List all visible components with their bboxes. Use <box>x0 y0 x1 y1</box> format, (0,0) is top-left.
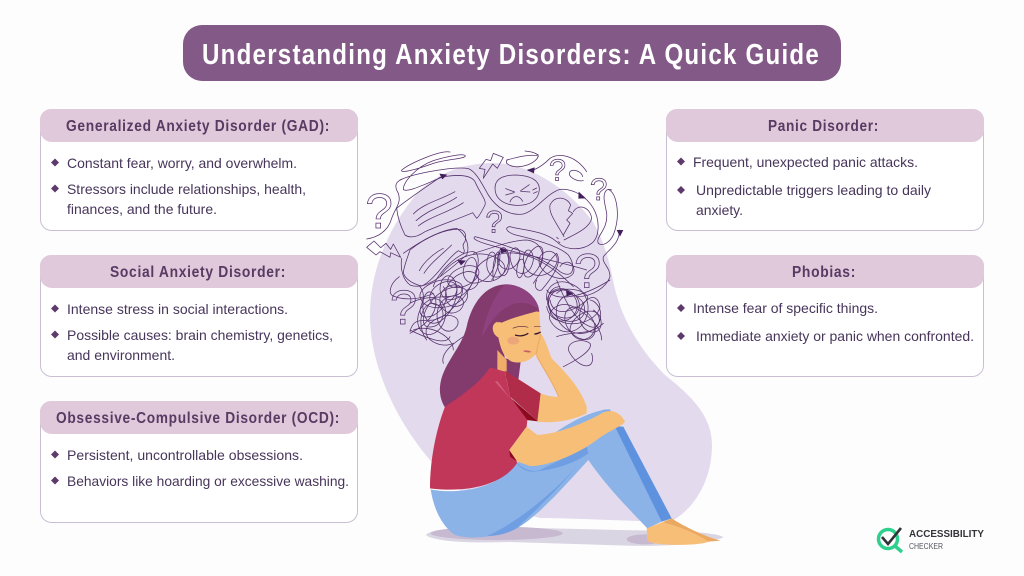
icon: magnifier with check <box>878 528 902 552</box>
icon: scribble knots <box>410 240 602 346</box>
shirt highlight <box>495 381 510 398</box>
panel: generalized anxiety disorder <box>40 109 358 230</box>
icon: lightning bolts <box>367 153 503 257</box>
far sleeve <box>505 371 541 421</box>
feet <box>647 518 720 545</box>
panel: panic disorder: Panic Disorder: <box>768 118 879 135</box>
icon: speech blob one <box>397 175 485 237</box>
neck <box>497 350 507 377</box>
panel: generalized anxiety disorder: Generalized Anxiety Disorder (GAD): <box>66 118 330 135</box>
icon: question marks: ? <box>549 154 566 188</box>
panel: phobias: Phobias: <box>792 264 856 281</box>
panel: generalized anxiety disorder: Constant fear, worry, and overwhelm. <box>67 155 297 171</box>
logo: accessibility checker: CHECKER <box>909 542 943 551</box>
icon: question marks <box>365 154 607 335</box>
logo: accessibility checker <box>878 528 984 552</box>
panel: panic disorder <box>666 109 984 230</box>
jeans <box>431 409 671 538</box>
panel: social anxiety disorder: and environment. <box>67 347 175 363</box>
icon: question marks: ? <box>390 281 417 335</box>
shirt fold <box>509 450 517 462</box>
panel: panic disorder: anxiety. <box>696 202 743 218</box>
foot shading <box>663 518 720 542</box>
far sleeve shadow <box>510 397 538 421</box>
icon: broken heart <box>550 198 592 243</box>
panel: social anxiety disorder <box>40 255 358 376</box>
panel: social anxiety disorder: Intense stress in social interactions. <box>67 301 288 317</box>
panel: generalized anxiety disorder: Stressors include relationships, health, <box>67 181 306 197</box>
panel: phobias: Immediate anxiety or panic when confronted. <box>696 328 974 344</box>
panel: social anxiety disorder: Possible causes: brain chemistry, genetics, <box>67 327 333 343</box>
icon: question marks: ? <box>365 184 393 239</box>
panel: obsessive-compulsive disorder: Behaviors like hoarding or excessive washing. <box>67 473 349 489</box>
panel: phobias: Intense fear of specific things. <box>693 300 878 316</box>
icon: looping thought line <box>367 151 619 297</box>
arm and hand shading <box>536 334 559 397</box>
title banner <box>183 25 841 81</box>
icon: question marks: ? <box>574 245 601 299</box>
fringe <box>497 306 539 323</box>
hair top highlight <box>482 284 539 338</box>
panel: social anxiety disorder: Social Anxiety Disorder: <box>110 264 286 281</box>
ground shadow <box>426 527 723 546</box>
icon: angry face <box>495 175 539 205</box>
logo: accessibility checker: ACCESSIBILITY <box>909 529 984 540</box>
icon: question marks: ? <box>590 172 607 207</box>
icon: question marks: ? <box>485 204 503 239</box>
illustration: seated woman <box>426 284 723 546</box>
panel: phobias <box>666 255 984 376</box>
icon: speech blob two <box>390 228 468 299</box>
shirt <box>430 367 527 490</box>
face <box>493 311 543 363</box>
panel: generalized anxiety disorder: finances, and the future. <box>67 201 217 217</box>
lower scribbles beside head <box>410 280 610 367</box>
hair back <box>440 284 539 407</box>
illustration: tangled thoughts scribble <box>365 151 623 346</box>
panel: obsessive-compulsive disorder: Obsessive-Compulsive Disorder (OCD): <box>56 410 340 427</box>
illustration: lavender background blob <box>370 163 712 521</box>
front arm and hand <box>509 411 625 466</box>
panel: panic disorder: Frequent, unexpected panic attacks. <box>693 154 918 170</box>
panel: obsessive-compulsive disorder <box>40 401 358 522</box>
propping arm <box>536 333 587 422</box>
icon: arrowheads <box>439 167 623 297</box>
panel: panic disorder: Unpredictable triggers leading to daily <box>696 182 931 198</box>
title banner: Understanding Anxiety Disorders: A Quick Guide <box>202 39 820 71</box>
cheek blush and features <box>507 326 541 352</box>
jeans shadow details <box>487 409 672 536</box>
panel: obsessive-compulsive disorder: Persistent, uncontrollable obsessions. <box>67 447 303 463</box>
